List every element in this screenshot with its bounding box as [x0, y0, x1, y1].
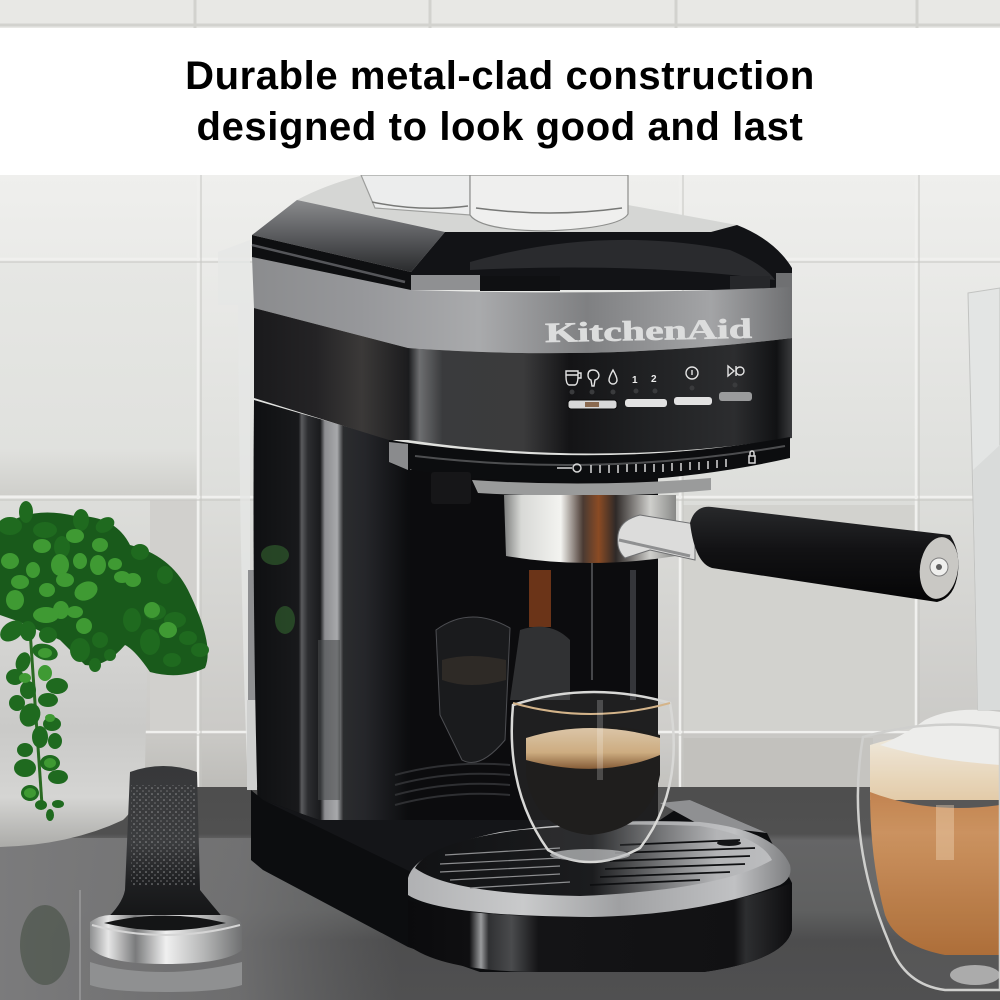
drip tray base [251, 790, 792, 972]
glass cups on top [297, 175, 737, 234]
machine back water tank [218, 240, 258, 790]
latte glass [858, 710, 1000, 990]
indicator dots [570, 382, 738, 394]
stainless steel band [252, 257, 792, 353]
group head and portafilter [431, 472, 962, 602]
plant [0, 501, 209, 821]
button numbers: 2 [651, 374, 657, 385]
tiled wall [0, 0, 1000, 800]
white title band [0, 28, 1000, 175]
machine column body [254, 400, 658, 822]
countertop [0, 787, 1000, 1000]
heading: designed to look good and last [197, 105, 803, 149]
glass carafe at right edge [968, 288, 1000, 710]
control buttons [568, 392, 752, 409]
machine lid top [252, 200, 792, 292]
control head [254, 308, 792, 482]
tamper [90, 766, 242, 992]
reflections in the machine [395, 563, 636, 805]
heading: Durable metal-clad construction [185, 54, 815, 98]
grind dial scale [557, 451, 755, 473]
heading [185, 54, 815, 149]
button numbers: 1 [632, 375, 638, 386]
button numbers [632, 374, 657, 386]
espresso glass [512, 692, 674, 862]
KitchenAid logo: KitchenAid [545, 314, 753, 349]
mode icons [566, 366, 744, 386]
plant pot [0, 610, 147, 847]
